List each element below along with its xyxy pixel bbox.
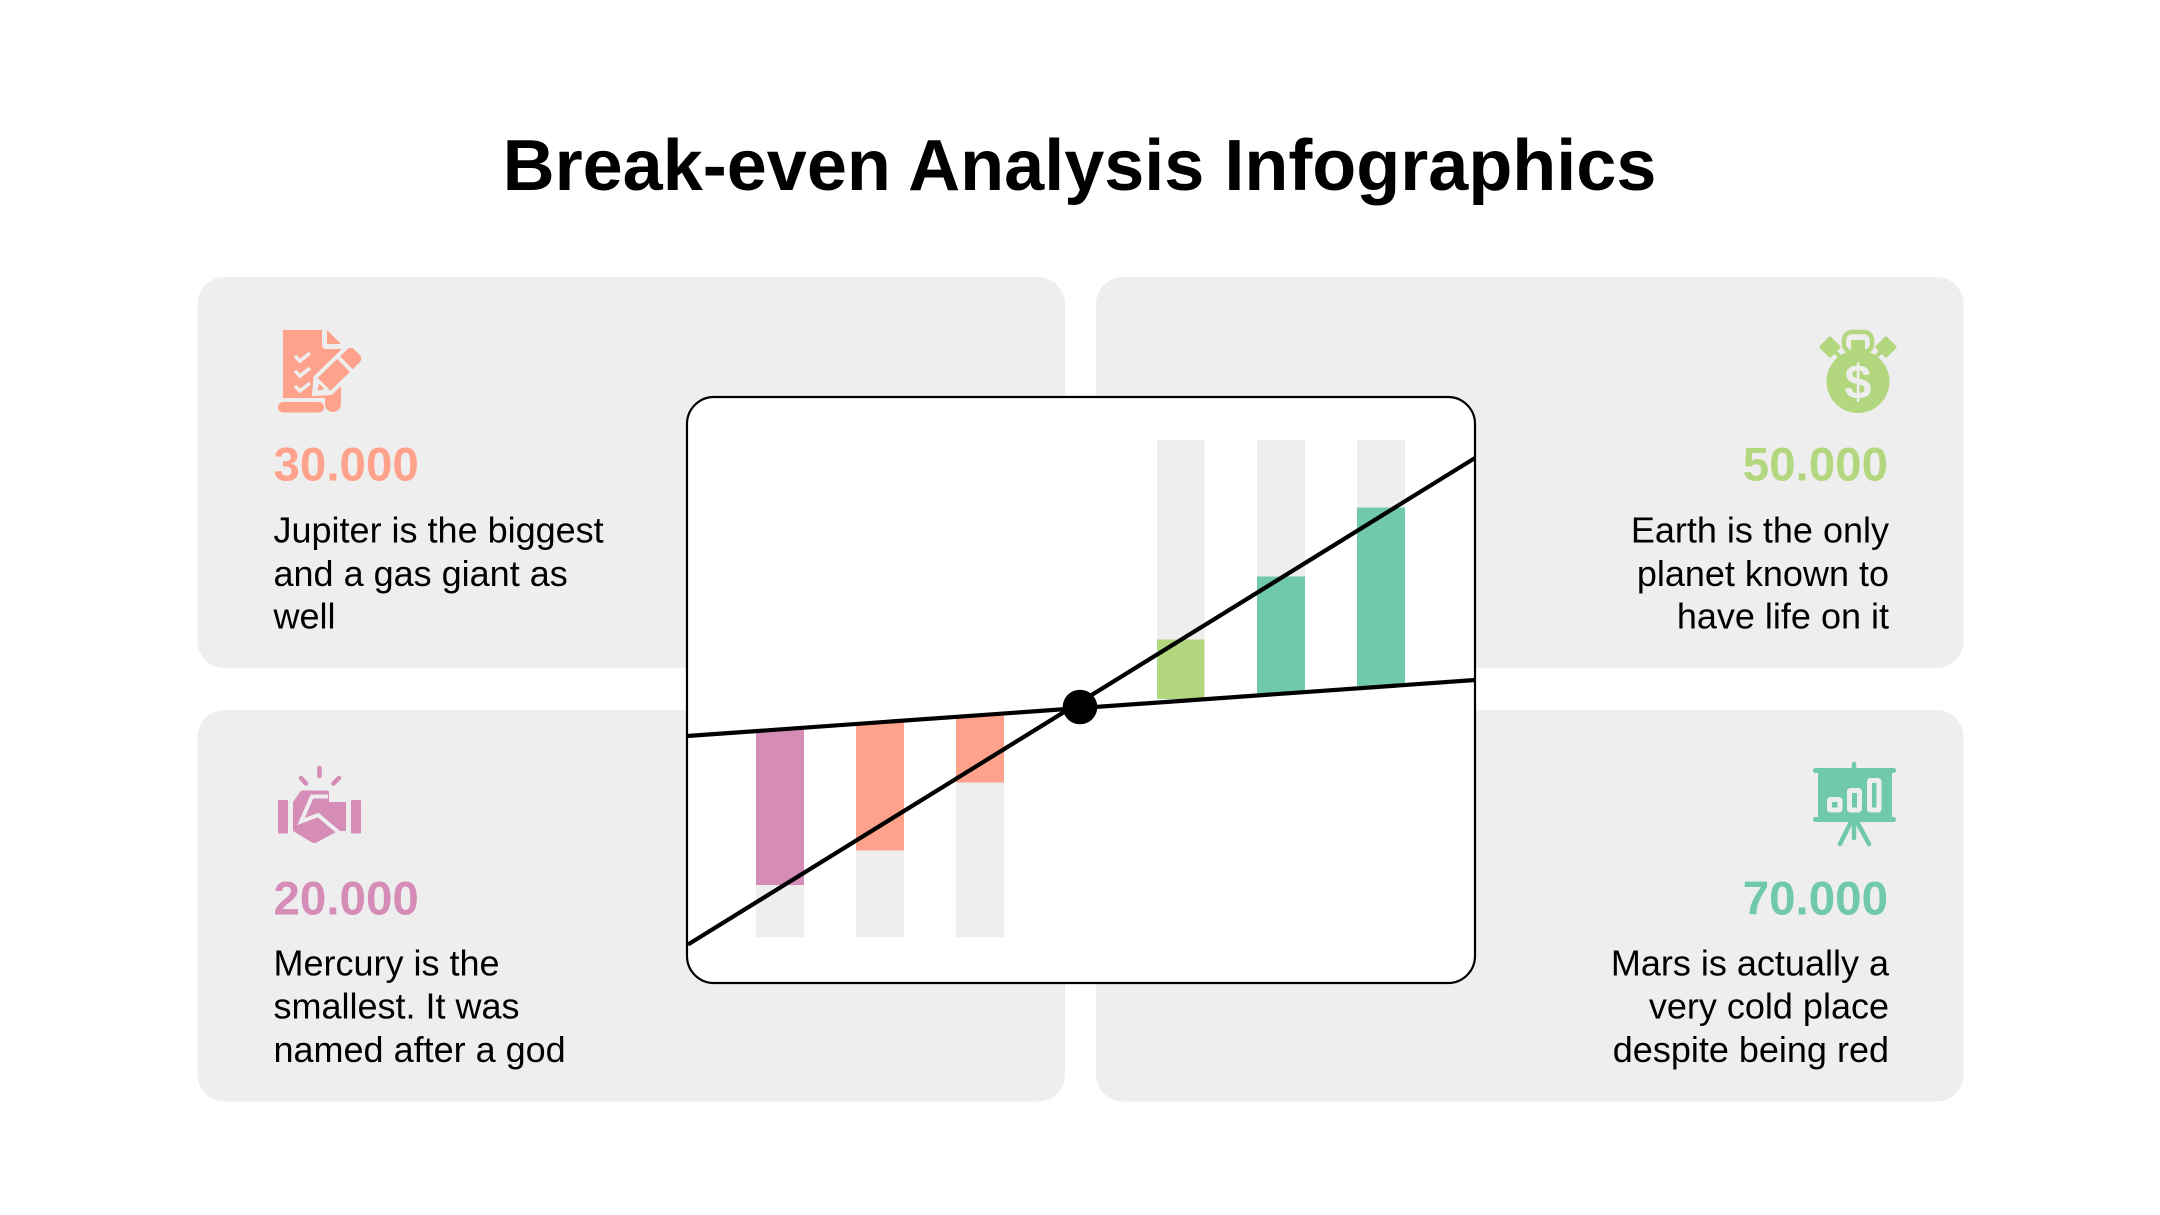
- panel: Mars 70.000: [1096, 710, 1964, 1102]
- icon: presentation board: [1813, 764, 1896, 844]
- revenue line: [688, 458, 1475, 944]
- profit bars: [1157, 440, 1405, 699]
- loss bars: [756, 715, 1004, 937]
- fixed cost line: [687, 680, 1475, 736]
- value: 70.000: 70.000: [1743, 872, 1888, 926]
- value: 30.000: 30.000: [274, 438, 419, 492]
- text: Mars description: very cold place: [1649, 986, 1889, 1027]
- text: Mercury description: smallest. It was: [274, 986, 520, 1027]
- panel: Mercury 20.000: [198, 710, 1065, 1102]
- value: 50.000: 50.000: [1743, 438, 1888, 492]
- panel: Jupiter 30.000: [198, 277, 1065, 668]
- chart frame: [687, 397, 1475, 983]
- break-even point: [1063, 690, 1097, 724]
- icon: money stopwatch: $: [1845, 356, 1872, 410]
- icon: handshake: [278, 768, 361, 843]
- value: 20.000: 20.000: [274, 872, 419, 926]
- chart: break-even chart: [687, 397, 1475, 983]
- text: Earth description: Earth is the only: [1631, 510, 1889, 550]
- icon: money stopwatch: [1819, 332, 1897, 413]
- text: Earth description: have life on it: [1677, 596, 1889, 636]
- text: Jupiter description: and a gas giant as: [274, 553, 568, 594]
- text: Jupiter description: well: [272, 596, 336, 636]
- text: Mercury description: Mercury is the: [274, 942, 500, 984]
- panel: Earth 50.000: [1096, 277, 1964, 668]
- text: Jupiter description: Jupiter is the biggest: [274, 510, 604, 550]
- title: Break-even Analysis Infographics: [503, 126, 1656, 206]
- text: Mars description: despite being red: [1613, 1029, 1889, 1070]
- text: Mercury description: named after a god: [274, 1029, 566, 1070]
- text: Mars description: Mars is actually a: [1611, 942, 1890, 984]
- icon: checklist and pencil: [278, 330, 369, 412]
- text: Earth description: planet known to: [1637, 553, 1889, 594]
